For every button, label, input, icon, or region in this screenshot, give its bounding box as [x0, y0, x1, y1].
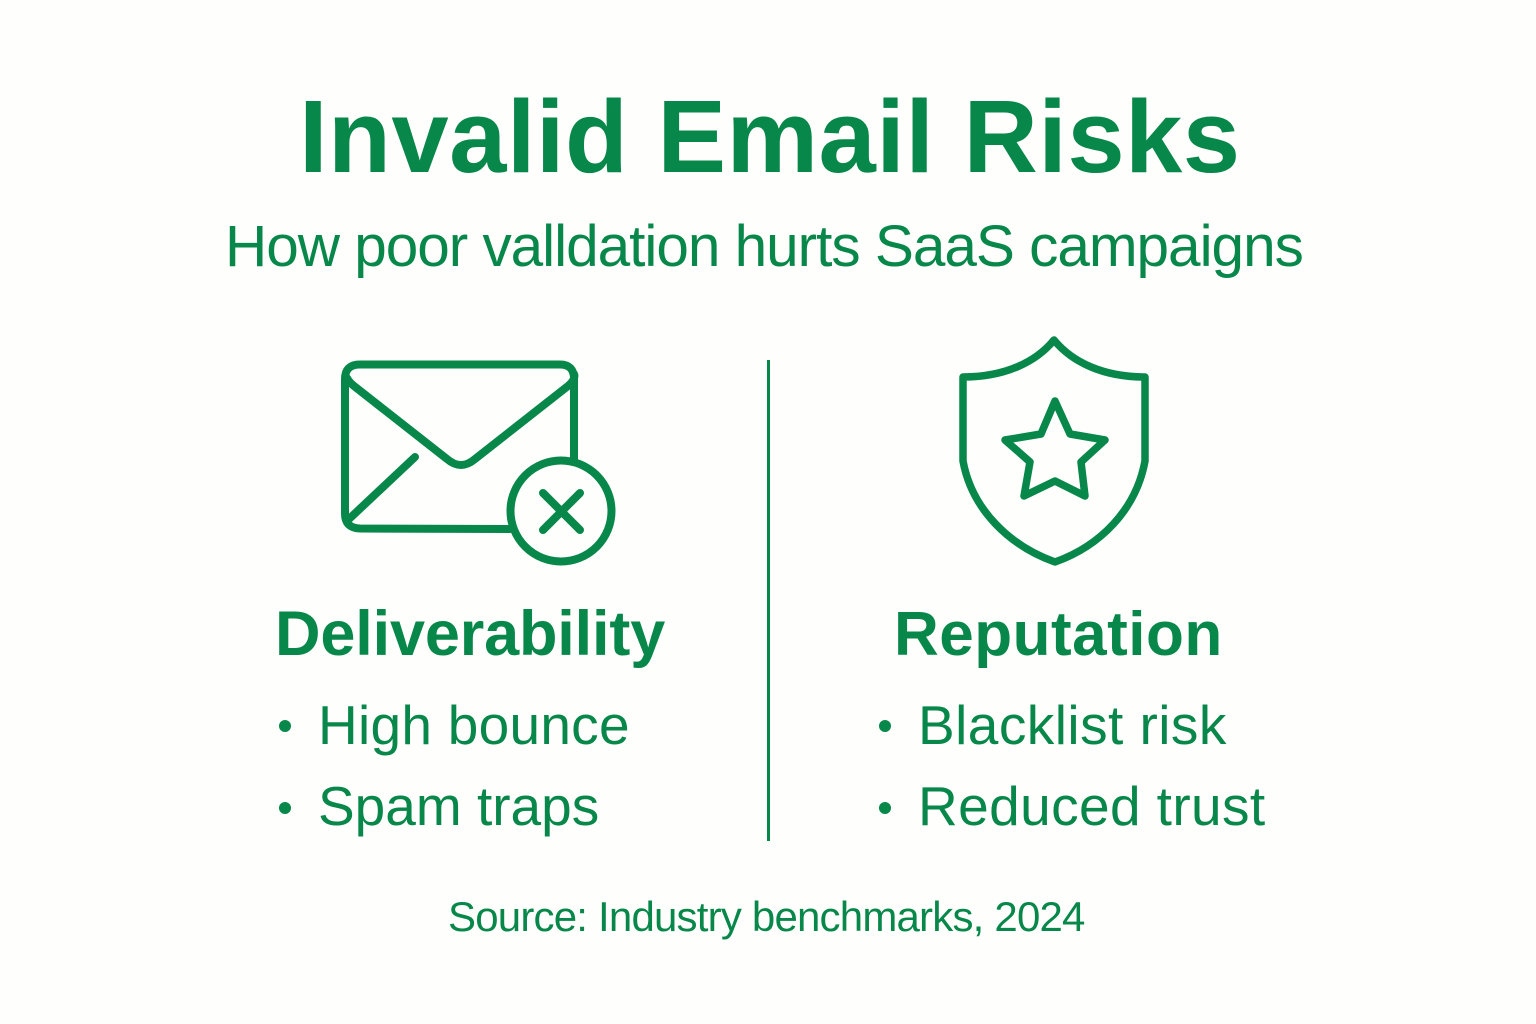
list: reputation: Blacklist risk	[918, 694, 1227, 756]
divider	[767, 360, 770, 841]
icon: envelope with x badge	[341, 360, 616, 566]
heading: Deliverability: Deliverability	[275, 599, 665, 669]
list: deliverability: Spam traps	[318, 775, 599, 837]
list: reputation: Reduced trust	[918, 775, 1266, 837]
icon: shield with star	[959, 336, 1149, 566]
list: deliverability: High bounce	[318, 694, 630, 756]
heading: Reputation: Reputation	[894, 600, 1223, 669]
list: reputation	[879, 694, 1266, 837]
list: deliverability	[279, 694, 630, 837]
source note: Source: Industry benchmarks, 2024	[448, 893, 1085, 940]
subtitle: How poor valldation hurts SaaS campaigns	[225, 214, 1303, 279]
title: Invalid Email Risks	[299, 79, 1240, 194]
